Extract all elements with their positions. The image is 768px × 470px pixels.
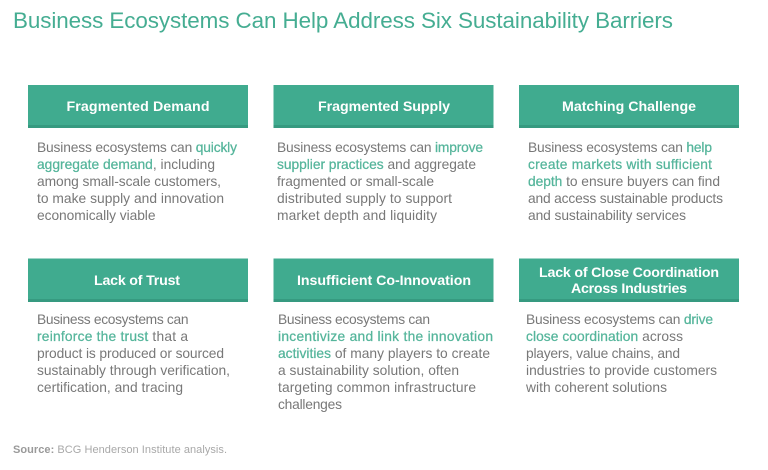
text: lack of trust: sustainably through verification,: [37, 363, 230, 378]
title: Business Ecosystems Can Help Address Six Sustainability Barriers: [13, 8, 673, 33]
heading: fragmented demand: [28, 85, 248, 128]
text: fragmented supply: [277, 140, 483, 223]
text: fragmented supply: supplier practices and aggregate: [277, 157, 476, 172]
panel: insufficient co-innovation: [274, 258, 494, 412]
text: lack of close coordination: industries to provide customers: [526, 363, 717, 378]
heading: lack of close coordination: Across Industries: [571, 281, 687, 297]
panel: matching challenge: [519, 85, 739, 223]
heading: insufficient co-innovation: [274, 258, 494, 302]
text: lack of close coordination: with coherent solutions: [525, 380, 667, 395]
source note: Source: BCG Henderson Institute analysis.: [13, 444, 227, 456]
text: insufficient co-innovation: incentivize and link the innovation: [278, 329, 493, 344]
text: matching challenge: Business ecosystems can help: [528, 140, 712, 155]
heading: insufficient co-innovation: Insufficient Co-Innovation: [297, 273, 471, 289]
panel: lack of close coordination: [519, 258, 739, 395]
panel: lack of trust: [28, 258, 248, 395]
heading: lack of close coordination: [519, 258, 739, 302]
text: matching challenge: [528, 140, 723, 223]
text: matching challenge: and access sustainable products: [528, 191, 723, 206]
heading: matching challenge: [519, 85, 739, 128]
text: fragmented demand: among small-scale customers,: [37, 174, 221, 189]
text: fragmented demand: economically viable: [37, 208, 156, 223]
text: lack of trust: certification, and tracing: [37, 380, 183, 395]
text: fragmented demand: aggregate demand, including: [37, 157, 215, 172]
text: insufficient co-innovation: a sustainability solution, often: [278, 363, 459, 378]
text: lack of close coordination: Business ecosystems can drive: [526, 312, 713, 327]
text: fragmented supply: distributed supply to support: [277, 191, 452, 206]
heading: lack of trust: Lack of Trust: [94, 273, 180, 289]
text: lack of trust: reinforce the trust that a: [37, 329, 188, 344]
text: lack of close coordination: [525, 312, 717, 395]
heading: lack of trust: [28, 258, 248, 302]
heading: fragmented supply: Fragmented Supply: [318, 99, 450, 115]
text: matching challenge: depth to ensure buyers can find: [528, 174, 720, 189]
heading: matching challenge: Matching Challenge: [562, 99, 696, 115]
text: insufficient co-innovation: targeting common infrastructure: [278, 380, 476, 395]
panel: fragmented supply: [274, 85, 494, 223]
text: fragmented supply: fragmented or small-scale: [277, 174, 434, 189]
text: fragmented supply: market depth and liquidity: [277, 208, 437, 223]
heading: lack of close coordination: Lack of Close Coordination: [539, 265, 719, 281]
heading: fragmented demand: Fragmented Demand: [66, 99, 210, 115]
heading: fragmented supply: [274, 85, 494, 128]
text: insufficient co-innovation: activities of many players to create: [278, 346, 490, 361]
text: matching challenge: create markets with sufficient: [528, 157, 712, 172]
panel: fragmented demand: [28, 85, 248, 223]
text: lack of trust: product is produced or sourced: [37, 346, 224, 361]
text: fragmented demand: [37, 140, 237, 223]
text: insufficient co-innovation: [278, 312, 493, 412]
text: matching challenge: and sustainability services: [528, 208, 686, 223]
text: fragmented demand: Business ecosystems can quickly: [37, 140, 237, 155]
text: lack of close coordination: players, value chains, and: [526, 346, 680, 361]
text: insufficient co-innovation: challenges: [278, 397, 342, 412]
text: fragmented demand: to make supply and innovation: [37, 191, 224, 206]
text: insufficient co-innovation: Business ecosystems can: [278, 312, 430, 327]
text: lack of trust: [37, 312, 230, 395]
text: fragmented supply: Business ecosystems can improve: [277, 140, 483, 155]
text: lack of trust: Business ecosystems can: [37, 312, 188, 327]
text: lack of close coordination: close coordination across: [526, 329, 683, 344]
